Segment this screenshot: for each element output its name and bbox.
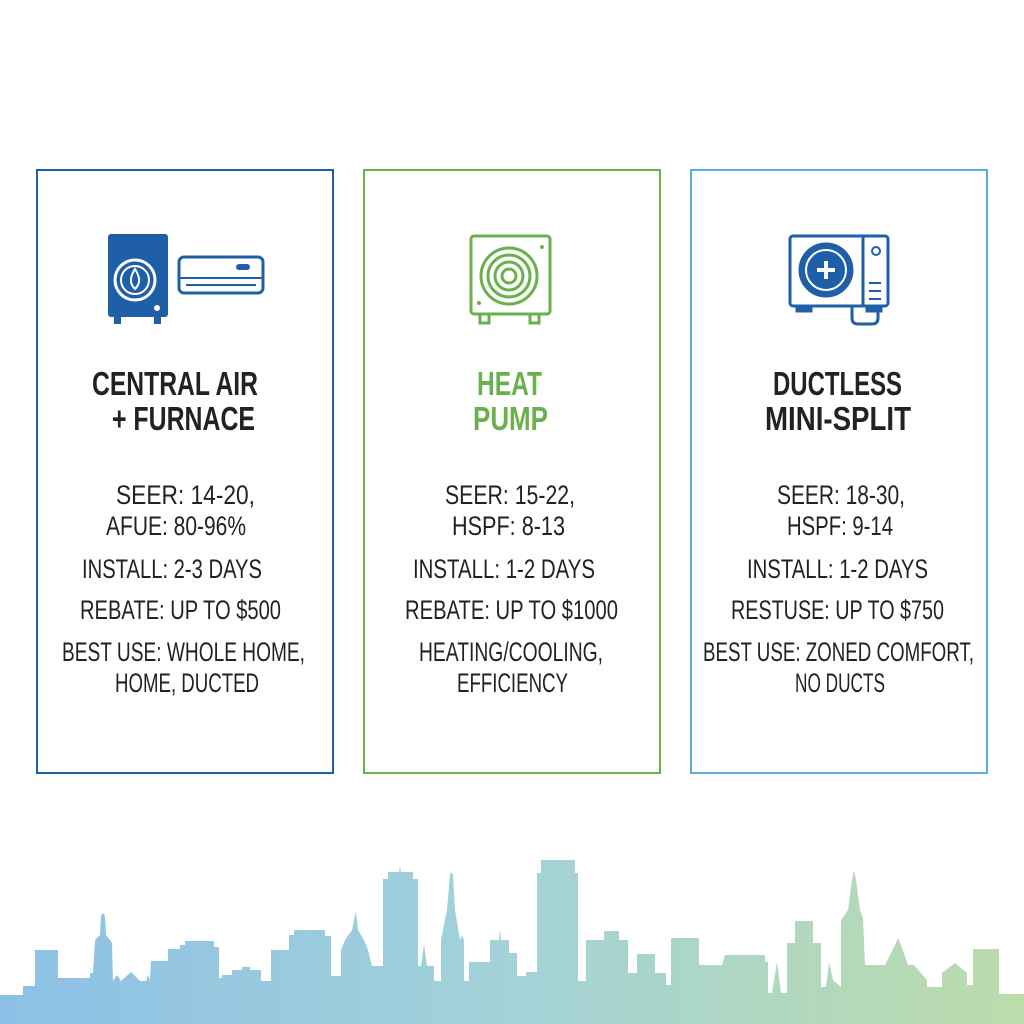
text block: specs: INSTALL: 2-3 DAYS xyxy=(82,554,262,584)
skyline xyxy=(0,860,1024,1024)
text block: specs: SEER: 18-30, xyxy=(777,480,905,510)
heading: PUMP xyxy=(473,400,548,437)
text block: specs: REBATE: UP TO $500 xyxy=(80,595,281,625)
heading: MINI-SPLIT xyxy=(765,400,911,437)
text block: specs: HSPF: 8-13 xyxy=(452,511,565,541)
panel: central air + furnace xyxy=(37,170,333,773)
text block: specs: INSTALL: 1-2 DAYS xyxy=(747,554,928,584)
text block: specs: EFFICIENCY xyxy=(457,668,568,698)
text block: specs: AFUE: 80-96% xyxy=(106,511,246,541)
heading: + FURNACE xyxy=(112,400,255,437)
text block: specs: INSTALL: 1-2 DAYS xyxy=(413,554,595,584)
text block: specs: HSPF: 9-14 xyxy=(787,511,893,541)
text block: specs: HEATING/COOLING, xyxy=(419,637,603,667)
panel: ductless mini-split xyxy=(691,170,987,773)
icon: mini-split xyxy=(790,236,888,324)
text block: specs: BEST USE: WHOLE HOME, xyxy=(62,637,305,667)
text block: specs: RESTUSE: UP TO $750 xyxy=(731,595,944,625)
text block: specs xyxy=(62,480,305,698)
icon: furnace and AC xyxy=(108,234,263,324)
text block: specs: HOME, DUCTED xyxy=(115,668,259,698)
heading xyxy=(473,365,548,437)
heading: CENTRAL AIR xyxy=(92,365,258,402)
heading xyxy=(92,365,258,437)
heading: HEAT xyxy=(477,365,542,402)
text block: specs: REBATE: UP TO $1000 xyxy=(405,595,618,625)
text block: specs xyxy=(405,480,618,698)
panel: heat pump xyxy=(364,170,660,773)
text block: specs: SEER: 15-22, xyxy=(445,480,575,510)
text block: specs: NO DUCTS xyxy=(795,668,885,698)
icon: heat pump xyxy=(471,236,550,323)
text block: specs xyxy=(703,480,974,698)
heading xyxy=(765,365,911,437)
heading: DUCTLESS xyxy=(773,365,902,402)
text block: specs: SEER: 14-20, xyxy=(116,480,255,510)
